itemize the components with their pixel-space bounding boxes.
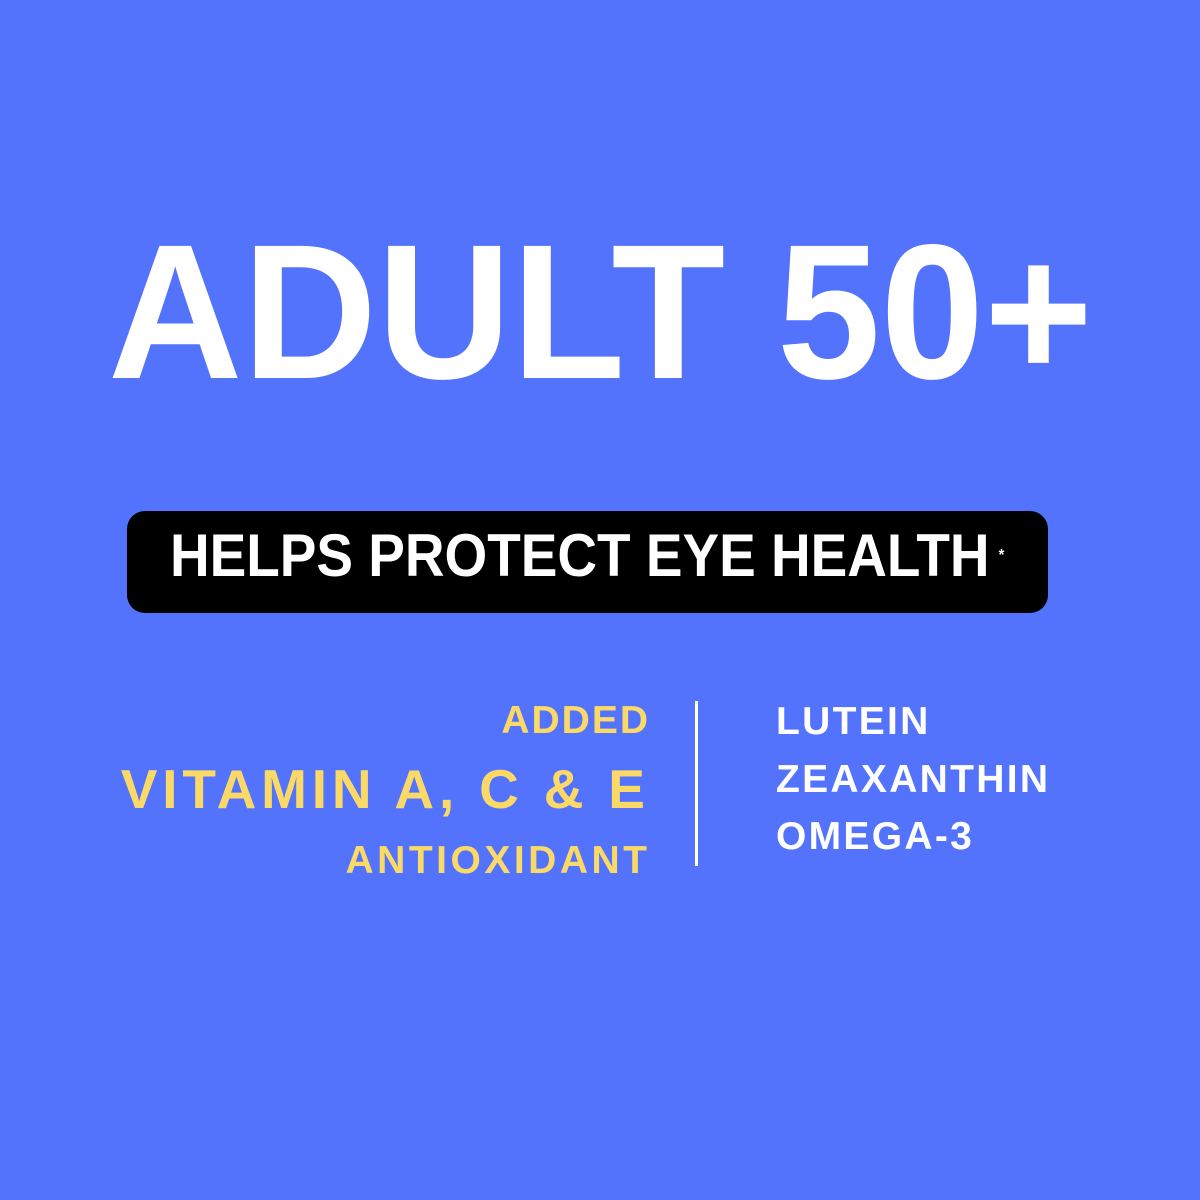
lutein: LUTEIN bbox=[776, 700, 931, 743]
right text block bbox=[776, 700, 1050, 858]
added: ADDED bbox=[501, 699, 650, 742]
vitamins: VITAMIN A, C & E bbox=[121, 758, 650, 820]
banner text: HELPS PROTECT EYE HEALTH * bbox=[170, 522, 1004, 589]
divider bbox=[695, 701, 698, 866]
left text block bbox=[121, 699, 650, 882]
banner bbox=[127, 511, 1048, 613]
antioxidant: ANTIOXIDANT bbox=[346, 839, 650, 882]
zeaxanthin: ZEAXANTHIN bbox=[776, 758, 1050, 801]
title: ADULT 50+ bbox=[108, 204, 1093, 419]
omega-3: OMEGA-3 bbox=[776, 815, 974, 858]
